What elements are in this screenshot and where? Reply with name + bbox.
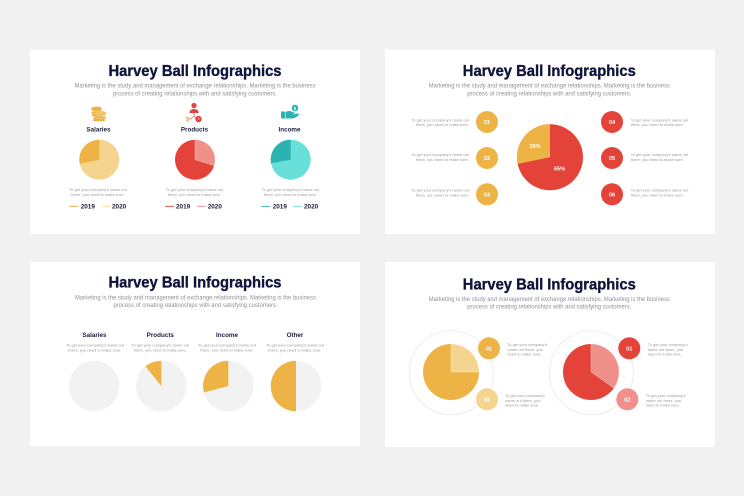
item 01: 01 — [484, 120, 490, 126]
column: Products: To get your company's name out — [131, 342, 190, 348]
legend: products: 2020 — [208, 204, 222, 211]
heading: Products: Products — [181, 126, 209, 134]
item 05 — [601, 147, 689, 169]
panel: three yearly harvey balls — [30, 50, 360, 234]
icon: person with money: $ — [186, 116, 190, 124]
legend: salaries: 2020 — [112, 204, 127, 211]
icon: coins — [91, 107, 106, 121]
subtitle — [429, 296, 670, 310]
item 06: 06 — [609, 192, 615, 198]
text block: red 01: To get your company's — [648, 342, 688, 347]
item 01: there, you need to make sure. — [416, 122, 469, 127]
chart: products harvey ball — [175, 140, 215, 180]
legend: income: 2019 — [273, 204, 287, 211]
subtitle: process of creating relationships with and satisfying customers. — [113, 90, 277, 97]
text block: products description — [166, 187, 224, 197]
item 01 — [411, 111, 498, 133]
chart: red ringed harvey ball — [549, 331, 633, 415]
text block: red 02: need to make sure. — [646, 402, 680, 408]
text block: yellow 02 — [505, 393, 545, 408]
column: Products — [131, 332, 190, 411]
badge 01 red — [618, 337, 640, 359]
text block: yellow 02: need to make sure. — [505, 402, 539, 408]
panel: ringed harvey balls — [385, 262, 715, 447]
text block: income description: there, you need to make sure. — [264, 192, 317, 197]
subtitle: process of creating relationships with and satisfying customers. — [467, 304, 631, 310]
text block: products description: To get your company's name out — [166, 187, 224, 192]
legend: income — [261, 204, 319, 211]
chart: 35/65 harvey ball: 65% — [554, 166, 565, 172]
text block: salaries description: there, you need to make sure. — [71, 192, 125, 197]
text block: red 01 — [648, 342, 688, 357]
badge 01 yellow: 01 — [486, 346, 492, 352]
chart: income harvey ball — [271, 140, 311, 180]
badge 02 light yellow — [476, 388, 498, 410]
chart: salaries harvey ball — [79, 140, 119, 180]
icon: hand with coin — [281, 105, 300, 118]
column: Salaries: Salaries — [82, 332, 107, 339]
text block: income description — [262, 187, 320, 197]
text block: yellow 01: To get your company's — [507, 342, 547, 347]
text block: yellow 01 — [507, 342, 547, 357]
text block: salaries description: To get your company's name out — [69, 187, 128, 192]
heading: Income: Income — [278, 126, 301, 134]
legend: income: 2020 — [304, 204, 319, 211]
badge 02 light red — [616, 388, 638, 410]
icon: person with money — [186, 103, 202, 124]
title: Harvey Ball Infographics — [463, 63, 636, 80]
text block: yellow 01: need to make sure. — [507, 352, 542, 357]
panel: four progress harvey balls — [30, 262, 360, 446]
column: Other — [266, 332, 325, 411]
text block: red 02: To get your company's — [646, 393, 686, 398]
text block: red 02 — [646, 393, 686, 408]
item 05: To get your company's name out — [631, 152, 689, 157]
item 05: there, you need to make sure. — [631, 157, 684, 162]
item 02: there, you need to make sure. — [416, 157, 469, 162]
column: Income: Income — [216, 332, 239, 339]
legend: salaries: 2019 — [81, 204, 95, 211]
subtitle: Marketing is the study and management of exchange relationships. Marketing is the business — [75, 294, 317, 301]
column: Income — [198, 332, 257, 411]
chart: 35/65 harvey ball: 35% — [529, 144, 541, 150]
item 02: To get your company's name out — [411, 152, 470, 157]
legend: salaries — [69, 204, 127, 211]
item 04: To get your company's name out — [631, 117, 689, 122]
item 04: there, you need to make sure. — [631, 122, 684, 127]
column: Income: there, you need to make sure. — [200, 347, 254, 352]
item 05: 05 — [609, 156, 615, 162]
subtitle: process of creating relationships with and satisfying customers. — [114, 302, 278, 309]
column: Salaries: there, you need to make sure. — [68, 347, 122, 352]
text block: red 01: name out there, you — [648, 347, 683, 352]
badge 01 red: 01 — [626, 346, 632, 352]
icon: hand with coin: $ — [294, 106, 297, 111]
legend: products: 2019 — [176, 204, 191, 211]
chart: 35/65 harvey ball — [517, 124, 583, 190]
text block: red 02: name out there, you — [646, 398, 681, 403]
subtitle — [75, 294, 317, 309]
column: Other: Other — [287, 332, 304, 339]
item 06 — [601, 183, 689, 205]
item 03 — [411, 183, 498, 205]
item 06: there, you need to make sure. — [631, 192, 684, 198]
title: Harvey Ball Infographics — [463, 276, 636, 293]
item 03: To get your company's name out — [411, 188, 470, 193]
title: Harvey Ball Infographics — [108, 63, 282, 80]
subtitle — [429, 83, 670, 97]
chart: yellow ringed harvey ball — [409, 331, 493, 415]
text block: salaries description — [69, 187, 128, 197]
title: Harvey Ball Infographics — [108, 274, 282, 292]
item 06: To get your company's name out — [631, 188, 689, 193]
item 03: 03 — [484, 192, 490, 198]
text block: yellow 02: name out there, you — [505, 398, 541, 403]
panel: 35/65 harvey ball with numbered items — [385, 50, 715, 234]
subtitle: Marketing is the study and management of exchange relationships. Marketing is the business — [74, 83, 316, 90]
column: Salaries: To get your company's name out — [66, 342, 125, 348]
item 04: 04 — [609, 120, 616, 126]
column: Products: Products — [147, 332, 174, 339]
badge 01 yellow — [478, 337, 500, 359]
text block: red 01: need to make sure. — [648, 352, 682, 357]
item 02 — [411, 147, 498, 169]
text block: income description: To get your company's name out — [262, 187, 320, 192]
item 03: there, you need to make sure. — [416, 192, 469, 198]
subtitle: Marketing is the study and management of exchange relationships. Marketing is the business — [429, 296, 670, 303]
column: Income: To get your company's name out — [198, 342, 257, 348]
item 01: To get your company's name out — [411, 117, 470, 122]
subtitle: Marketing is the study and management of exchange relationships. Marketing is the business — [429, 83, 670, 90]
text block: yellow 01: name out there, you — [507, 347, 543, 352]
item 02: 02 — [484, 156, 490, 162]
item 04 — [601, 111, 689, 133]
subtitle — [74, 83, 316, 97]
column: Salaries — [66, 332, 125, 411]
text block: yellow 02: To get your company's — [505, 393, 545, 398]
text block: products description: there, you need to make sure. — [168, 192, 221, 197]
badge 02 light yellow: 02 — [484, 397, 490, 403]
column: Other: there, you need to make sure. — [268, 347, 322, 352]
badge 02 light red: 02 — [624, 397, 630, 403]
column: Other: To get your company's name out — [266, 342, 325, 348]
column: Products: there, you need to make sure. — [134, 347, 187, 352]
heading: Salaries: Salaries — [86, 126, 111, 134]
legend: products — [165, 204, 222, 211]
subtitle: process of creating relationships with and satisfying customers. — [467, 90, 631, 97]
